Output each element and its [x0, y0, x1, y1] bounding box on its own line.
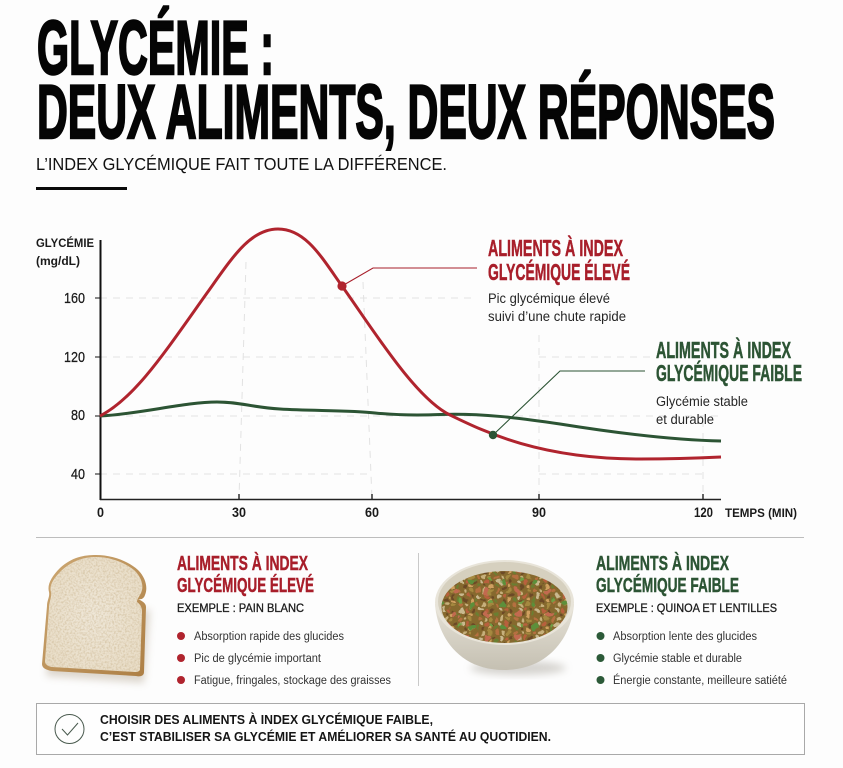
- conclusion text: CHOISIR DES ALIMENTS À INDEX GLYCÉMIQUE FAIBLE,: [100, 712, 433, 727]
- y axis title: (mg/dL): [36, 254, 80, 268]
- x axis values: [97, 504, 713, 520]
- callout: low index: et durable: [656, 412, 714, 427]
- conclusion text: [100, 712, 551, 744]
- y axis title: GLYCÉMIE: [36, 235, 94, 250]
- title: [37, 6, 775, 155]
- y axis title: [36, 235, 94, 268]
- x axis title: TEMPS (MIN): [725, 506, 797, 520]
- callout: high index: suivi d’une chute rapide: [488, 309, 626, 324]
- icon: check mark: [55, 714, 84, 744]
- heading: ALIMENTS À INDEX: [596, 552, 729, 575]
- callout leader: low index: [489, 371, 645, 439]
- bullet list: Absorption lente des glucides: [613, 631, 757, 643]
- bullet list: Énergie constante, meilleure satiété: [613, 674, 787, 687]
- y axis values: 160: [64, 291, 85, 307]
- heading: ALIMENTS À INDEX: [177, 552, 308, 575]
- y axis values: 40: [71, 467, 85, 483]
- x axis values: 0: [97, 504, 104, 520]
- heading: GLYCÉMIQUE FAIBLE: [596, 574, 739, 597]
- title: GLYCÉMIE :: [37, 6, 274, 91]
- callout: high index: Pic glycémique élevé: [488, 291, 610, 306]
- y axis values: [64, 291, 85, 483]
- bullet list: Pic de glycémie important: [194, 653, 322, 665]
- bullet list: Absorption rapide des glucides: [194, 631, 344, 643]
- y axis values: 120: [64, 350, 85, 366]
- callout: high index: [488, 234, 630, 324]
- heading: GLYCÉMIQUE ÉLEVÉ: [177, 574, 314, 597]
- x axis: [100, 494, 721, 500]
- example: EXEMPLE : PAIN BLANC: [177, 601, 304, 615]
- callout: high index: GLYCÉMIQUE ÉLEVÉ: [488, 258, 630, 285]
- callout leader: high index: [337, 268, 477, 291]
- y axis values: 80: [71, 408, 85, 424]
- curve: low glycemic index: [100, 402, 721, 441]
- panel: high index food: [42, 552, 391, 687]
- callout: high index: ALIMENTS À INDEX: [488, 234, 623, 261]
- panel: low index food: [435, 552, 787, 687]
- example: EXEMPLE : QUINOA ET LENTILLES: [596, 601, 777, 615]
- callout: low index: Glycémie stable: [656, 394, 748, 409]
- title underline: [36, 187, 127, 190]
- conclusion box: [36, 704, 804, 754]
- conclusion text: C’EST STABILISER SA GLYCÉMIE ET AMÉLIORER SA SANTÉ AU QUOTIDIEN.: [100, 729, 551, 744]
- line chart: [36, 229, 797, 520]
- bullet list: Glycémie stable et durable: [613, 653, 742, 665]
- x axis values: 120: [694, 504, 713, 520]
- heading: [596, 552, 739, 597]
- icon: bread slice: [42, 555, 150, 683]
- x axis values: 90: [532, 504, 546, 520]
- y axis: [95, 240, 100, 500]
- x axis values: 60: [365, 504, 379, 520]
- subtitle: L’INDEX GLYCÉMIQUE FAIT TOUTE LA DIFFÉRENCE.: [36, 154, 447, 174]
- x axis values: 30: [232, 504, 246, 520]
- curve: high glycemic index: [100, 229, 721, 459]
- bullet list: [177, 631, 391, 687]
- heading: [177, 552, 314, 597]
- callout: low index: [656, 336, 802, 427]
- icon: bowl of quinoa and lentils: [435, 560, 574, 675]
- bullet list: [596, 631, 787, 687]
- bullet list: Fatigue, fringales, stockage des graisses: [194, 675, 391, 687]
